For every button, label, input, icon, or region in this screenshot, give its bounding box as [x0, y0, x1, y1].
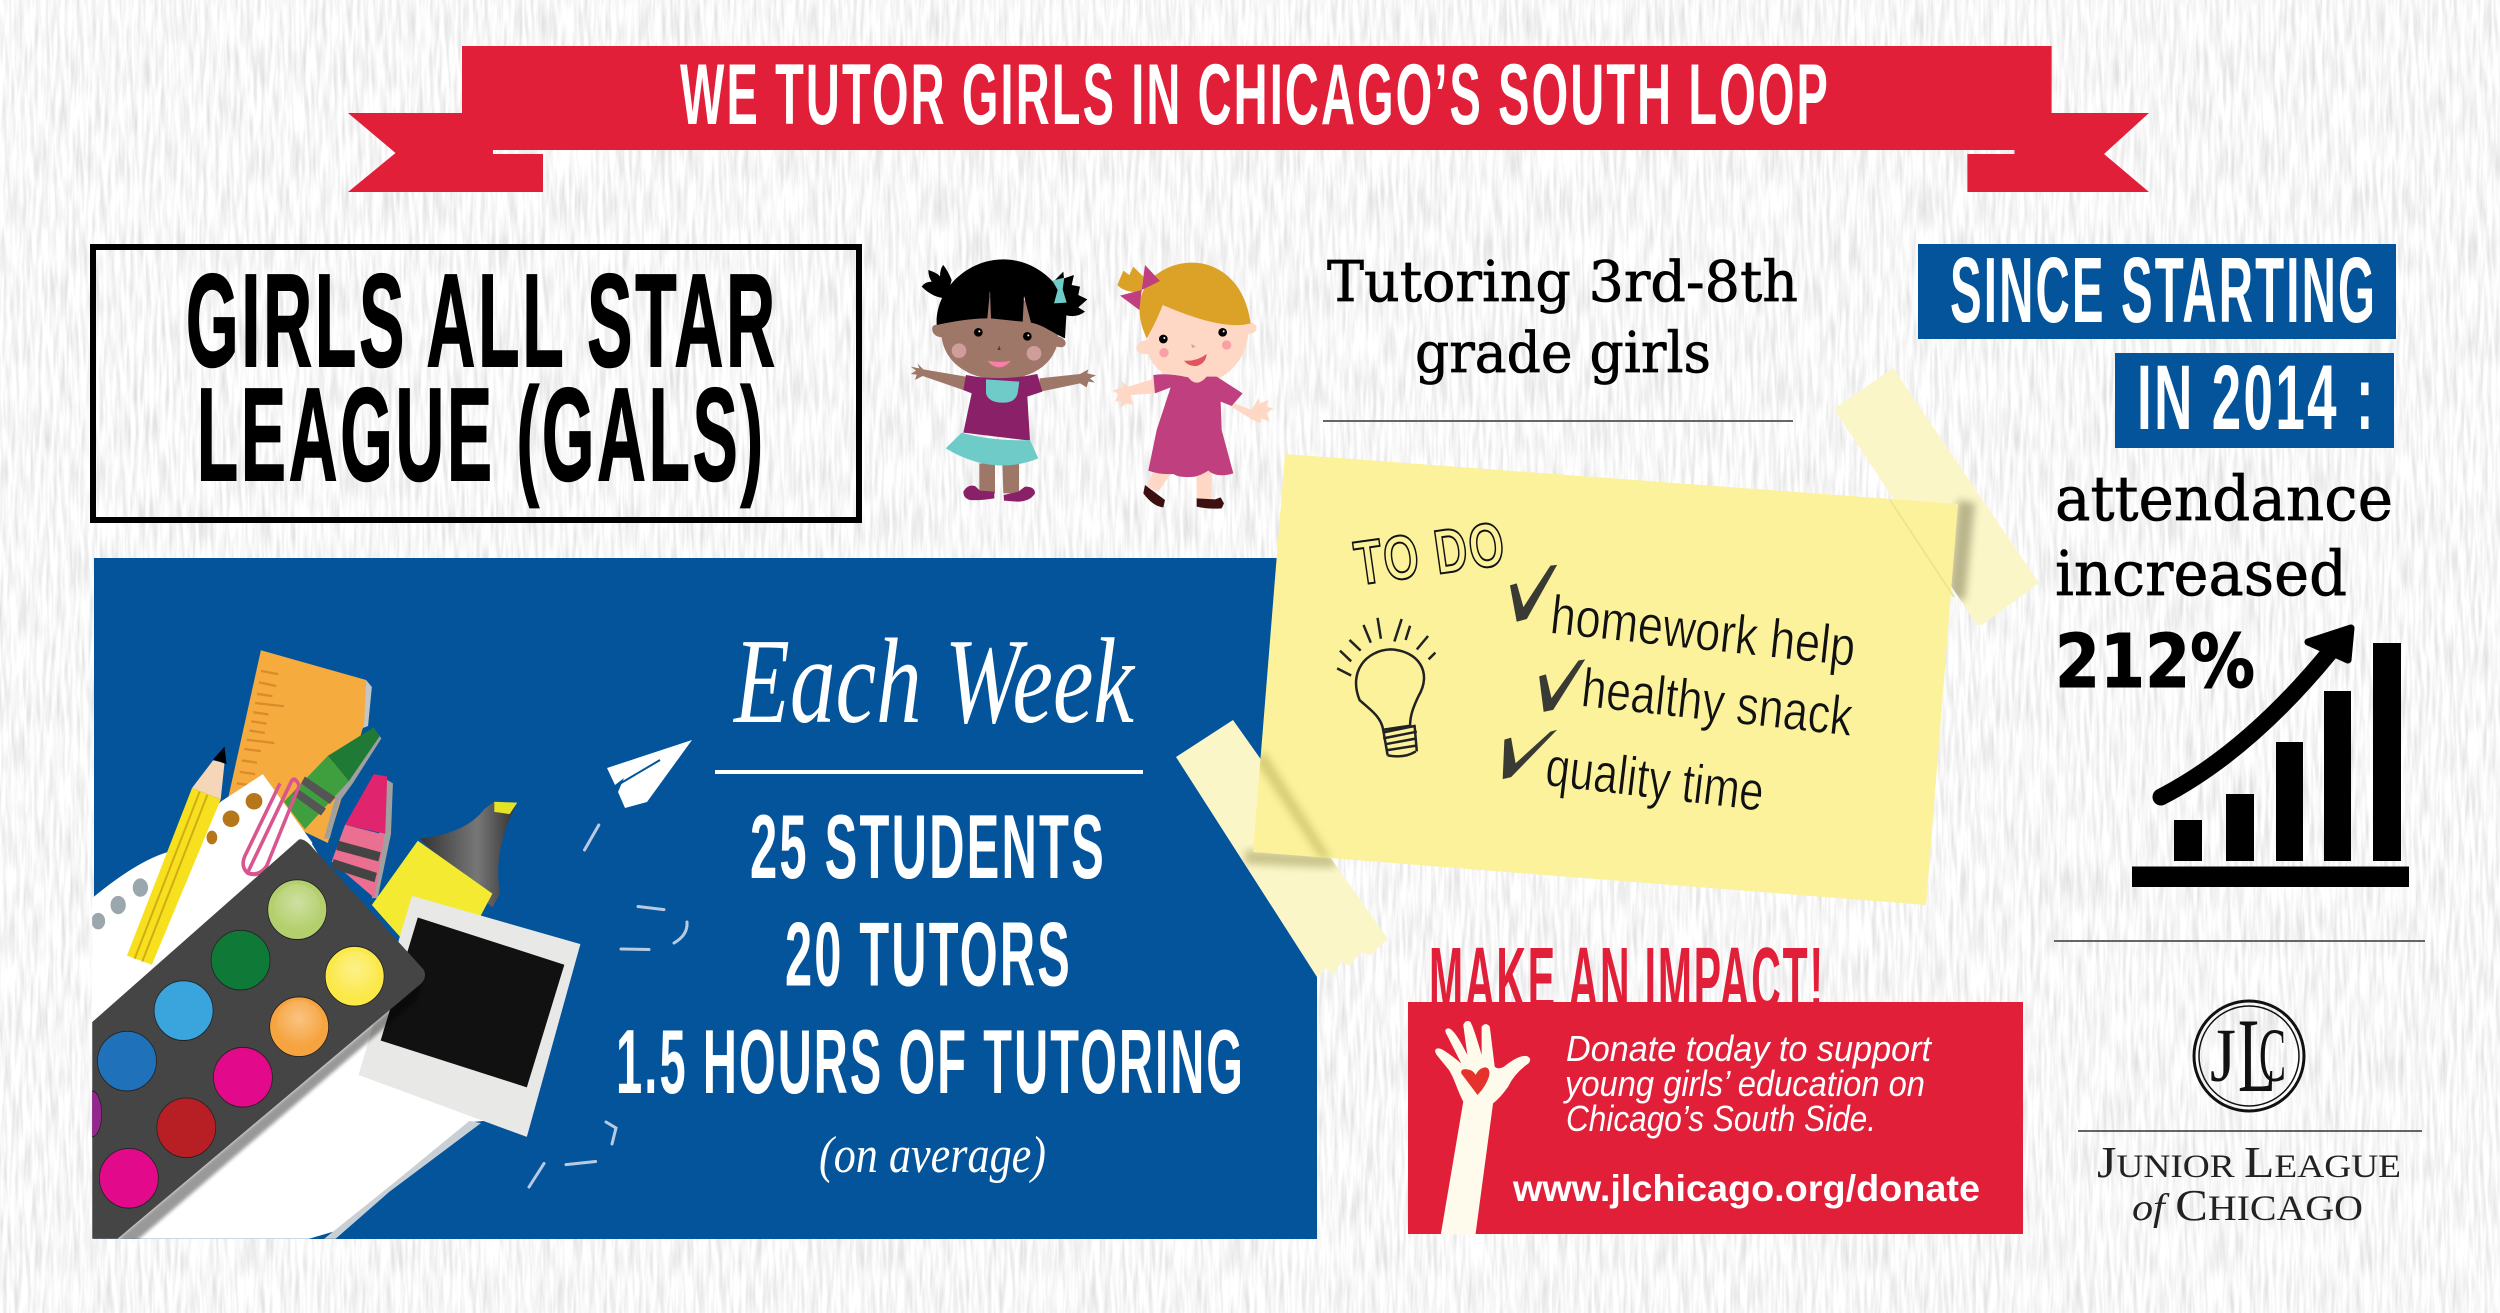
attendance statistic text: 212%	[2055, 619, 2255, 705]
weekly stats: 20 TUTORS	[785, 904, 1072, 1006]
attendance statistic text: increased	[2055, 537, 2347, 610]
to do items: healthy snack	[1579, 656, 1856, 748]
tutoring grades text: Tutoring 3rd-8th	[1327, 250, 1798, 315]
girl with blonde hair	[1112, 263, 1273, 509]
icon: check marks	[1503, 565, 1585, 779]
logo wordmark	[2097, 1138, 2401, 1230]
to do items: homework help	[1548, 583, 1859, 678]
icon: hand with heart	[1435, 1021, 1530, 1234]
paper plane with dashed trail	[529, 740, 692, 1187]
panel: make an impact	[1408, 930, 2023, 1234]
heading: each week: Each Week	[733, 614, 1135, 749]
donate text: Donate today to support	[1566, 1028, 1933, 1069]
donate url: www.jlchicago.org/donate	[1512, 1168, 1980, 1209]
logo wordmark: JUNIOR LEAGUE	[2097, 1138, 2401, 1187]
donate text: young girls’ education on	[1562, 1063, 1925, 1104]
icon: light bulb	[1337, 618, 1435, 756]
weekly stats: 25 STUDENTS	[750, 797, 1106, 898]
illustration: two girls	[911, 259, 1273, 509]
logo emblem: J	[2210, 1014, 2236, 1098]
logo emblem	[2194, 997, 2304, 1114]
panel: each week blue	[83, 558, 1317, 1243]
title ribbon banner	[348, 46, 2149, 192]
girl with dark hair	[911, 259, 1096, 502]
attendance statistic text	[2055, 462, 2393, 705]
to do items: quality time	[1543, 735, 1767, 823]
tutoring grades text	[1327, 250, 1798, 386]
chart: rising bars with arrow	[2132, 628, 2409, 887]
heading box: Girls All Star League: GIRLS ALL STAR	[186, 247, 778, 394]
donate text: Chicago’s South Side.	[1566, 1098, 1876, 1139]
logo wordmark: of CHICAGO	[2132, 1181, 2363, 1230]
heading box: Girls All Star League: LEAGUE (GALS)	[197, 361, 766, 508]
to do items	[1543, 583, 1859, 823]
weekly stats: 1.5 HOURS OF TUTORING	[616, 1012, 1245, 1113]
sticky note: to do list	[1253, 454, 1958, 905]
attendance statistic text: attendance	[2055, 462, 2393, 535]
to do heading: TO DO	[1350, 509, 1510, 599]
tape: top right	[1834, 368, 2039, 625]
logo emblem: L	[2238, 997, 2276, 1114]
logo: junior league of chicago	[2078, 997, 2422, 1230]
tape: bottom left	[1176, 720, 1388, 977]
panel: make an impact: MAKE AN IMPACT!	[1429, 930, 1825, 1030]
on average note: (on average)	[819, 1127, 1046, 1184]
heading box: Girls All Star League	[93, 247, 859, 520]
school supplies illustration	[83, 650, 580, 1243]
heading: since starting in 2014	[1918, 238, 2396, 449]
tutoring grades text: grade girls	[1415, 321, 1711, 386]
donate text	[1562, 1028, 1933, 1139]
logo emblem: C	[2259, 1014, 2286, 1098]
weekly stats	[616, 797, 1245, 1113]
